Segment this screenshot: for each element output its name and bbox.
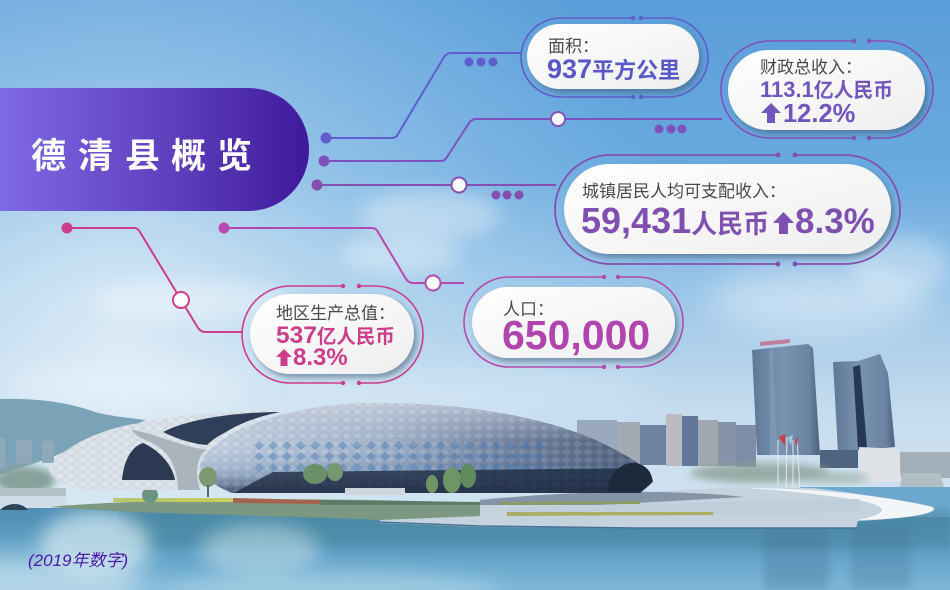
lawn shore (50, 487, 480, 520)
panel: area (521, 16, 708, 99)
left bridge (0, 488, 66, 510)
connector: GDP (62, 222, 242, 332)
icon: up arrow (761, 103, 781, 123)
value: area: 937平方公里 (547, 54, 680, 84)
water (0, 487, 950, 590)
connector: urban income (312, 178, 556, 200)
flags (778, 434, 800, 490)
connector: area (320, 53, 521, 144)
trees and vans in front of dome (199, 463, 476, 497)
icon: up arrow (773, 212, 794, 234)
title banner (0, 88, 309, 211)
title: 德清县概览 (31, 137, 252, 176)
panel: population (464, 275, 683, 369)
tower B (833, 354, 895, 452)
tower A (752, 339, 820, 455)
value: population: 650,000 (502, 312, 650, 358)
tree band (0, 463, 870, 494)
connector: fiscal revenue (318, 112, 722, 166)
label: fiscal revenue: 财政总收入： (760, 58, 862, 77)
connector: population (218, 222, 464, 290)
change: GDP: 8.3% (293, 344, 348, 371)
value: urban income: 59,431人民币 (581, 200, 769, 241)
change: urban income: 8.3% (795, 202, 875, 241)
label: area: 面积： (548, 37, 599, 56)
low buildings and white pavilion (820, 447, 950, 487)
panel: urban income (555, 152, 900, 266)
value: GDP: 537亿人民币 (276, 322, 395, 349)
main dome (195, 400, 660, 495)
plaza and curved walkway (380, 487, 934, 528)
panel: fiscal revenue (721, 39, 933, 140)
left dome (49, 410, 287, 490)
label: GDP: 地区生产总值： (276, 304, 395, 323)
icon: up arrow (276, 349, 292, 366)
mid-rise buildings (577, 414, 756, 467)
value: fiscal revenue: 113.1亿人民币 (760, 77, 893, 102)
label: urban income: 城镇居民人均可支配收入： (582, 182, 786, 201)
label: population: 人口： (503, 300, 554, 319)
change: fiscal revenue: 12.2% (783, 100, 855, 128)
footnote: (2019年数字) (28, 551, 128, 570)
far skyline left (0, 438, 54, 468)
mountain (0, 399, 146, 475)
water reflections (0, 510, 950, 590)
panel: GDP (242, 284, 423, 385)
